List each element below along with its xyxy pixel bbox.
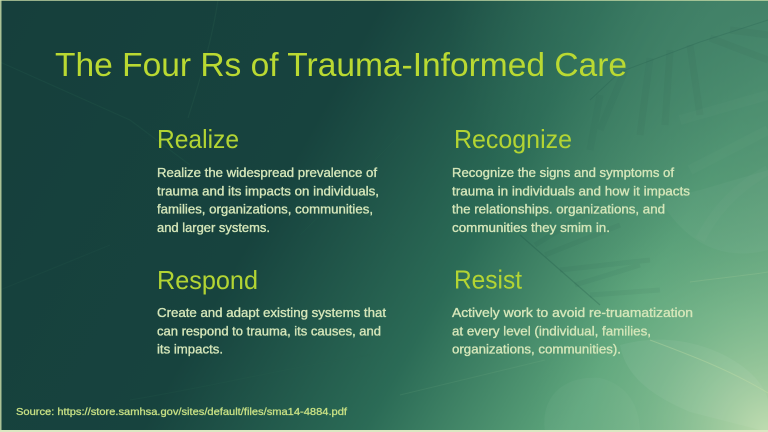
- text: Recognize description: [452, 165, 691, 235]
- text: Realize description: trauma and its impacts on individuals,: [157, 183, 379, 198]
- text: Recognize description: trauma in individuals and how it impacts: [452, 183, 691, 198]
- text: Resist description: organizations, communities).: [452, 342, 621, 357]
- text: Recognize description: the relationships. organizations, and: [452, 202, 665, 217]
- text: Resist description: [452, 305, 693, 357]
- heading: Recognize: Recognize: [454, 124, 572, 154]
- text: Realize description: Realize the widespread prevalence of: [157, 165, 377, 180]
- text: Recognize description: Recognize the signs and symptoms of: [452, 165, 674, 180]
- text: Realize description: families, organizations, communities,: [157, 202, 373, 217]
- text: Recognize description: communities they smim in.: [452, 220, 610, 235]
- heading: Respond: Respond: [157, 265, 258, 295]
- title: The Four Rs of Trauma-Informed Care: [55, 47, 627, 84]
- text: Realize description: [157, 165, 379, 235]
- text: Respond description: [157, 305, 386, 357]
- text: Respond description: can respond to trauma, its causes, and: [157, 323, 381, 338]
- source citation: Source: https://store.samhsa.gov/sites/default/files/sma14-4884.pdf: [16, 406, 347, 418]
- panel: Recognize: [452, 124, 691, 235]
- panel: Respond: [157, 265, 386, 357]
- heading: Resist: Resist: [454, 264, 523, 294]
- panel: Realize: [157, 124, 379, 235]
- text: Resist description: at every level (individual, families,: [452, 323, 651, 338]
- text: Respond description: its impacts.: [157, 342, 223, 357]
- text: Respond description: Create and adapt existing systems that: [157, 305, 386, 320]
- panel: Resist: [452, 264, 693, 357]
- text: Realize description: and larger systems.: [157, 220, 270, 235]
- heading: Realize: Realize: [157, 124, 239, 154]
- text: Resist description: Actively work to avoid re-truamatization: [452, 305, 693, 320]
